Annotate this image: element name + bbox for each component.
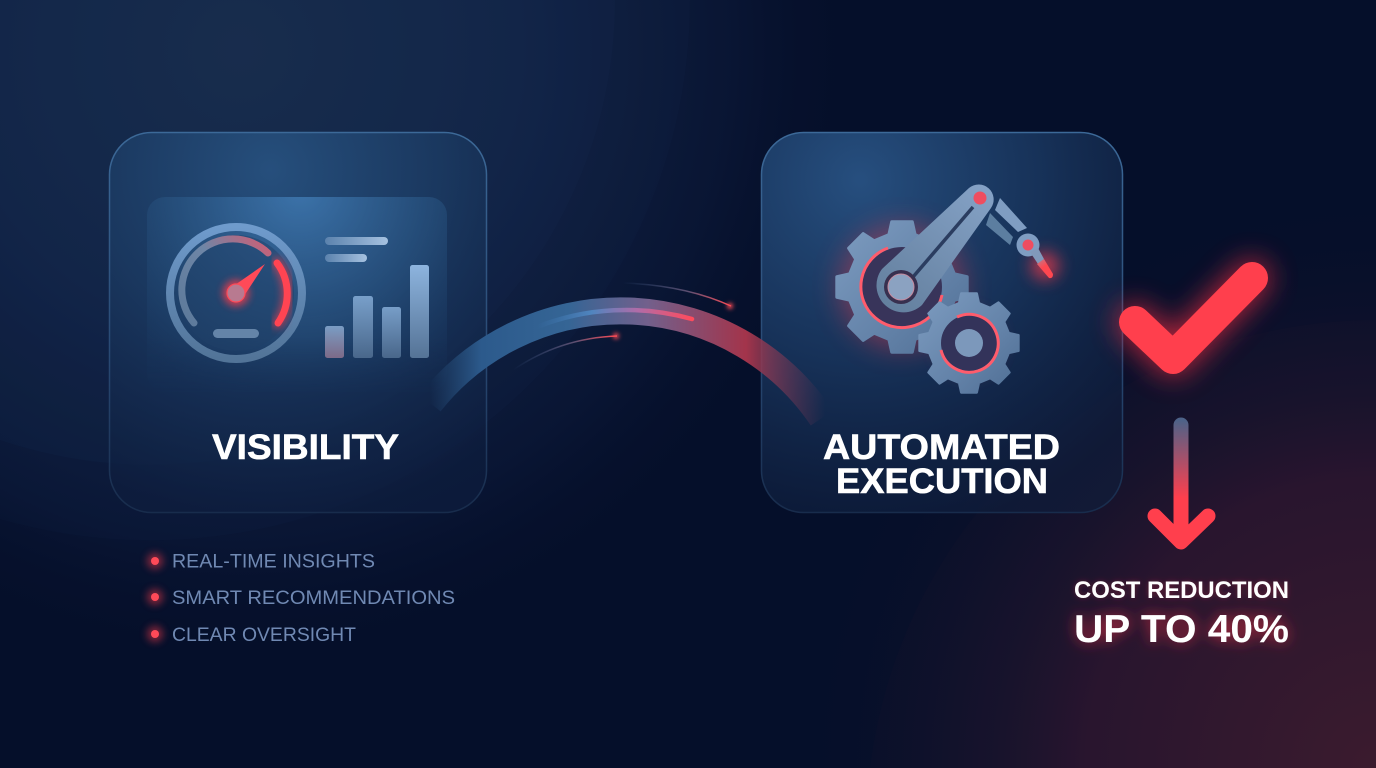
arrow: down arrow <box>1155 425 1208 542</box>
callout: cost reduction: COST REDUCTION <box>1074 577 1289 604</box>
upper arm <box>876 184 994 312</box>
callout: cost reduction <box>1074 577 1289 651</box>
icon: speedometer gauge <box>170 227 302 359</box>
small gear <box>919 293 1019 393</box>
text block: visibility bullets: SMART RECOMMENDATIONS <box>172 587 455 609</box>
wrist joint and tool <box>1016 234 1040 256</box>
text block: visibility bullets <box>147 550 455 646</box>
icon: robot arm and gears <box>837 184 1059 393</box>
forearm <box>995 198 1027 232</box>
arrow: curved connector <box>430 283 822 418</box>
panel: visibility card <box>110 132 486 512</box>
callout: cost reduction: UP TO 40% <box>1074 608 1289 651</box>
heading: automated execution: EXECUTION <box>836 462 1048 501</box>
panel: automated execution card <box>762 132 1122 512</box>
text block: visibility bullets: REAL-TIME INSIGHTS <box>172 550 375 572</box>
dashboard panel <box>147 197 447 362</box>
heading: visibility: VISIBILITY <box>212 428 399 467</box>
large gear <box>837 222 967 352</box>
heading: automated execution: AUTOMATED <box>823 428 1060 467</box>
text block: visibility bullets: CLEAR OVERSIGHT <box>172 624 356 646</box>
heading: automated execution <box>823 428 1060 501</box>
icon: bar chart <box>325 237 429 358</box>
icon: check mark <box>1135 278 1252 358</box>
